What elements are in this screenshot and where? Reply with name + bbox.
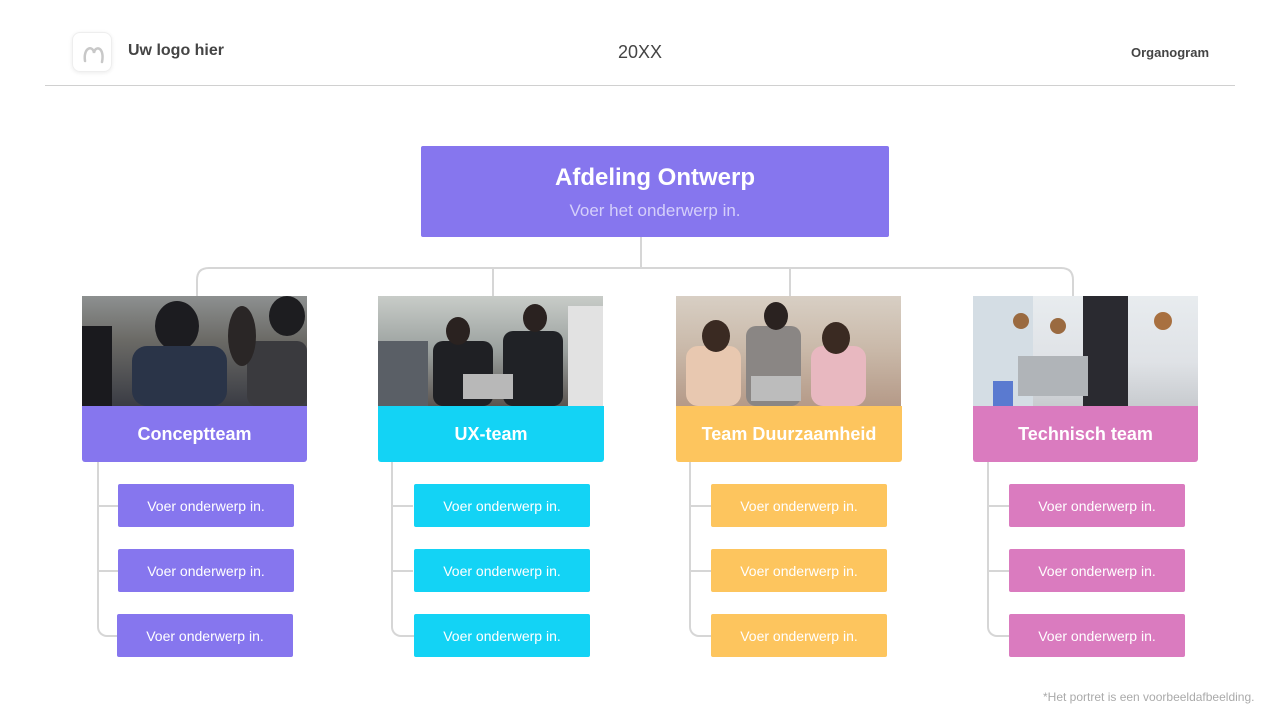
team header xyxy=(676,406,902,462)
sub items col 1: Voer onderwerp in. xyxy=(147,562,265,578)
sub items col 3: Voer onderwerp in. xyxy=(740,628,858,644)
header: logo xyxy=(72,32,112,72)
sub items col 1: Voer onderwerp in. xyxy=(147,498,265,514)
photo: smiling team xyxy=(676,296,901,406)
sub items col 2 xyxy=(414,484,590,657)
sub items col 2: Voer onderwerp in. xyxy=(443,498,561,514)
sub items col 3: Voer onderwerp in. xyxy=(740,562,858,578)
sub items col 4: Voer onderwerp in. xyxy=(1038,498,1156,514)
team header: Team Duurzaamheid xyxy=(702,424,876,444)
sub items col 3: Voer onderwerp in. xyxy=(740,498,858,514)
column 4: Technisch team xyxy=(973,296,1198,462)
team header xyxy=(378,406,604,462)
sub items col 4: Voer onderwerp in. xyxy=(1038,628,1156,644)
sub items col 1: Voer onderwerp in. xyxy=(146,628,264,644)
team header xyxy=(973,406,1198,462)
top box: Afdeling Ontwerp: Voer het onderwerp in. xyxy=(569,201,741,220)
header: logo text: Uw logo hier xyxy=(128,42,224,59)
sub items col 3 xyxy=(711,484,887,657)
photo: coffee hands xyxy=(973,296,1198,406)
header: year: 20XX xyxy=(618,42,662,62)
sub items col 4 xyxy=(1009,484,1185,657)
sub items col 4: Voer onderwerp in. xyxy=(1038,562,1156,578)
header: label: Organogram xyxy=(1131,45,1209,60)
team header xyxy=(82,406,307,462)
team header: UX-team xyxy=(454,424,528,444)
top box: Afdeling Ontwerp: Afdeling Ontwerp xyxy=(555,164,755,191)
column 1: Conceptteam xyxy=(82,296,307,462)
top box: Afdeling Ontwerp xyxy=(421,146,889,237)
photo: laptop meeting xyxy=(378,296,603,406)
photo: meeting xyxy=(82,296,307,406)
team header: Conceptteam xyxy=(137,424,252,444)
sub items col 2: Voer onderwerp in. xyxy=(443,628,561,644)
footnote: *Het portret is een voorbeeldafbeelding. xyxy=(1043,690,1254,704)
sub items col 2: Voer onderwerp in. xyxy=(443,562,561,578)
column 3: Team Duurzaamheid xyxy=(676,296,902,462)
column 2: UX-team xyxy=(378,296,604,462)
team header: Technisch team xyxy=(1018,424,1153,444)
sub items col 1 xyxy=(117,484,294,657)
